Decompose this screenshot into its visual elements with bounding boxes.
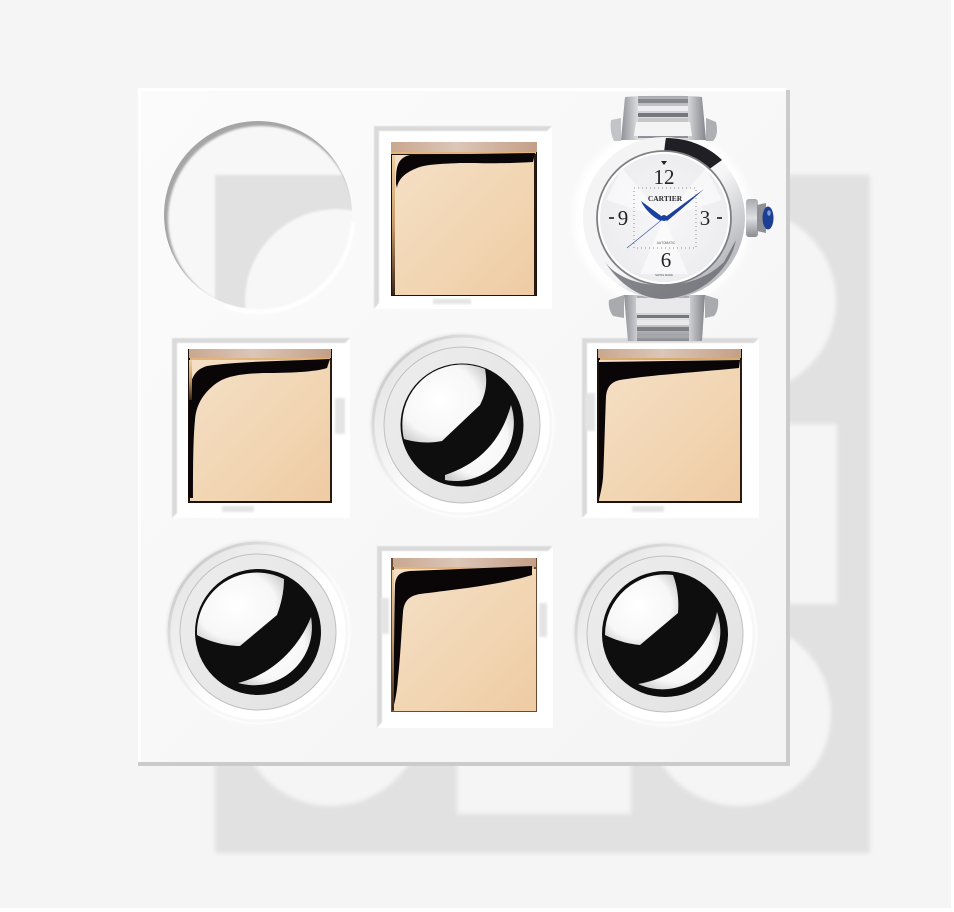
crown xyxy=(746,199,774,237)
empty circular opening xyxy=(164,121,352,308)
board xyxy=(138,88,790,766)
hands xyxy=(641,201,664,221)
ball: bottom left xyxy=(166,540,350,724)
soft halo around watch xyxy=(573,129,751,307)
dial: AUTOMATIC xyxy=(657,241,676,245)
cast shadow of the board xyxy=(215,175,870,853)
dial: 6 xyxy=(661,248,671,272)
ball: bottom right xyxy=(573,542,757,726)
bracelet top xyxy=(611,96,717,141)
dial: SWISS MADE xyxy=(655,273,673,277)
dial: 3 xyxy=(700,206,710,230)
slot: middle left with gold block xyxy=(172,338,350,518)
numerals: 12 xyxy=(654,165,674,189)
brand: CARTIER xyxy=(648,194,683,203)
slot: bottom centre with gold block xyxy=(377,546,553,728)
watch xyxy=(573,96,774,341)
case xyxy=(583,137,745,299)
dial xyxy=(600,154,728,282)
bracelet bottom xyxy=(609,295,718,341)
slot: middle right with gold block xyxy=(582,338,759,518)
dial: 9 xyxy=(618,206,628,230)
slot: top centre with gold block xyxy=(374,126,552,309)
ball: centre xyxy=(370,333,554,517)
